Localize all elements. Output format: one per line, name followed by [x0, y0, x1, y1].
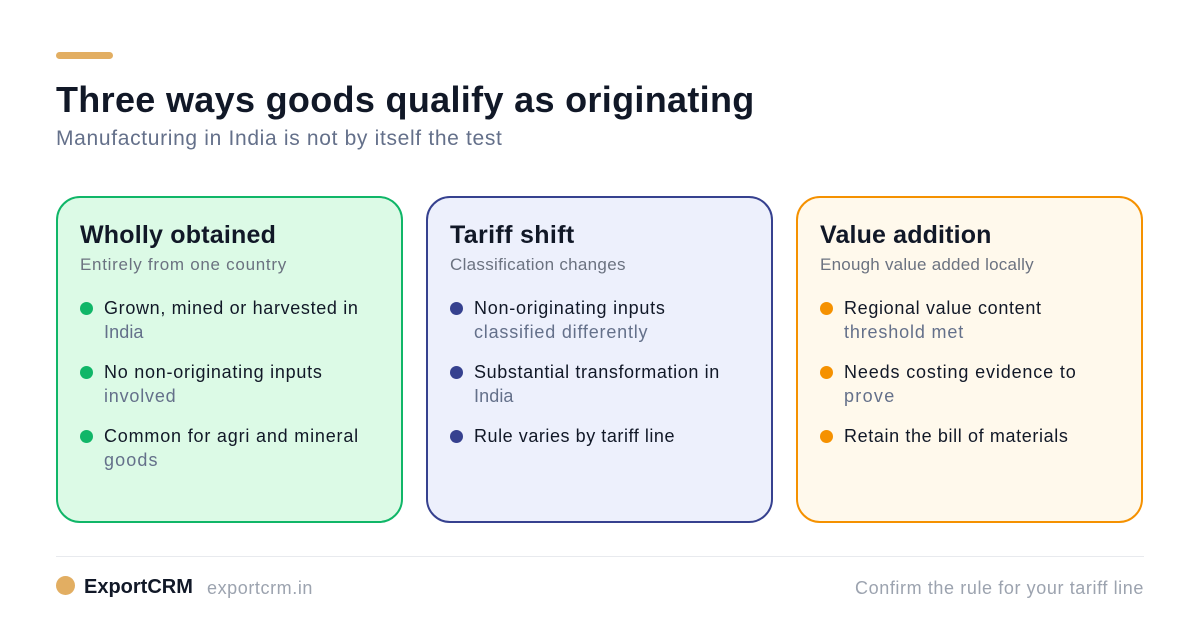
accent bar	[56, 52, 113, 59]
text: transformation: Substantial transformation in	[474, 362, 720, 382]
text: regional value	[844, 298, 1042, 342]
text: grown: Grown, mined or harvested in	[104, 298, 359, 318]
text: common: goods	[104, 450, 159, 470]
text: regional value: Regional value content	[844, 298, 1042, 318]
text: costing	[844, 362, 1077, 406]
bullet: grown	[80, 302, 93, 315]
subheading: value addition: Enough value added locally	[820, 255, 1034, 274]
subheading: tariff shift: Classification changes	[450, 255, 626, 274]
bullet: transformation	[450, 366, 463, 379]
text: no inputs: involved	[104, 386, 176, 406]
text: non-originating: Non-originating inputs	[474, 298, 666, 318]
heading: wholly obtained: Wholly obtained	[80, 221, 276, 249]
bullet: bill of materials	[820, 430, 833, 443]
text: costing: Needs costing evidence to	[844, 362, 1077, 382]
bullet: non-originating	[450, 302, 463, 315]
heading: value addition: Value addition	[820, 221, 992, 249]
subtitle: Manufacturing in India is not by itself the test	[56, 127, 503, 150]
text: no inputs: No non-originating inputs	[104, 362, 323, 382]
brand dot	[56, 576, 75, 595]
footer note: Confirm the rule for your tariff line	[855, 578, 1144, 598]
text: non-originating	[474, 298, 666, 342]
text: rule varies: Rule varies by tariff line	[474, 426, 675, 446]
text: grown: India	[104, 322, 144, 342]
text: common	[104, 426, 359, 470]
text: non-originating: classified differently	[474, 322, 648, 342]
heading: tariff shift: Tariff shift	[450, 221, 575, 249]
bullet: common	[80, 430, 93, 443]
bullet: rule varies	[450, 430, 463, 443]
title: Three ways goods qualify as originating	[56, 79, 755, 120]
brand name: ExportCRM	[84, 576, 193, 598]
text: bill of materials: Retain the bill of materials	[844, 426, 1068, 446]
bullet: costing	[820, 366, 833, 379]
brand url: exportcrm.in	[207, 578, 313, 598]
subheading: wholly obtained: Entirely from one country	[80, 255, 287, 274]
text: costing: prove	[844, 386, 896, 406]
text: regional value: threshold met	[844, 322, 964, 342]
bullet: no inputs	[80, 366, 93, 379]
text: grown	[104, 298, 359, 342]
text: common: Common for agri and mineral	[104, 426, 359, 446]
bullet: regional value	[820, 302, 833, 315]
text: transformation: India	[474, 386, 514, 406]
text: no inputs	[104, 362, 323, 406]
text: transformation	[474, 362, 720, 406]
